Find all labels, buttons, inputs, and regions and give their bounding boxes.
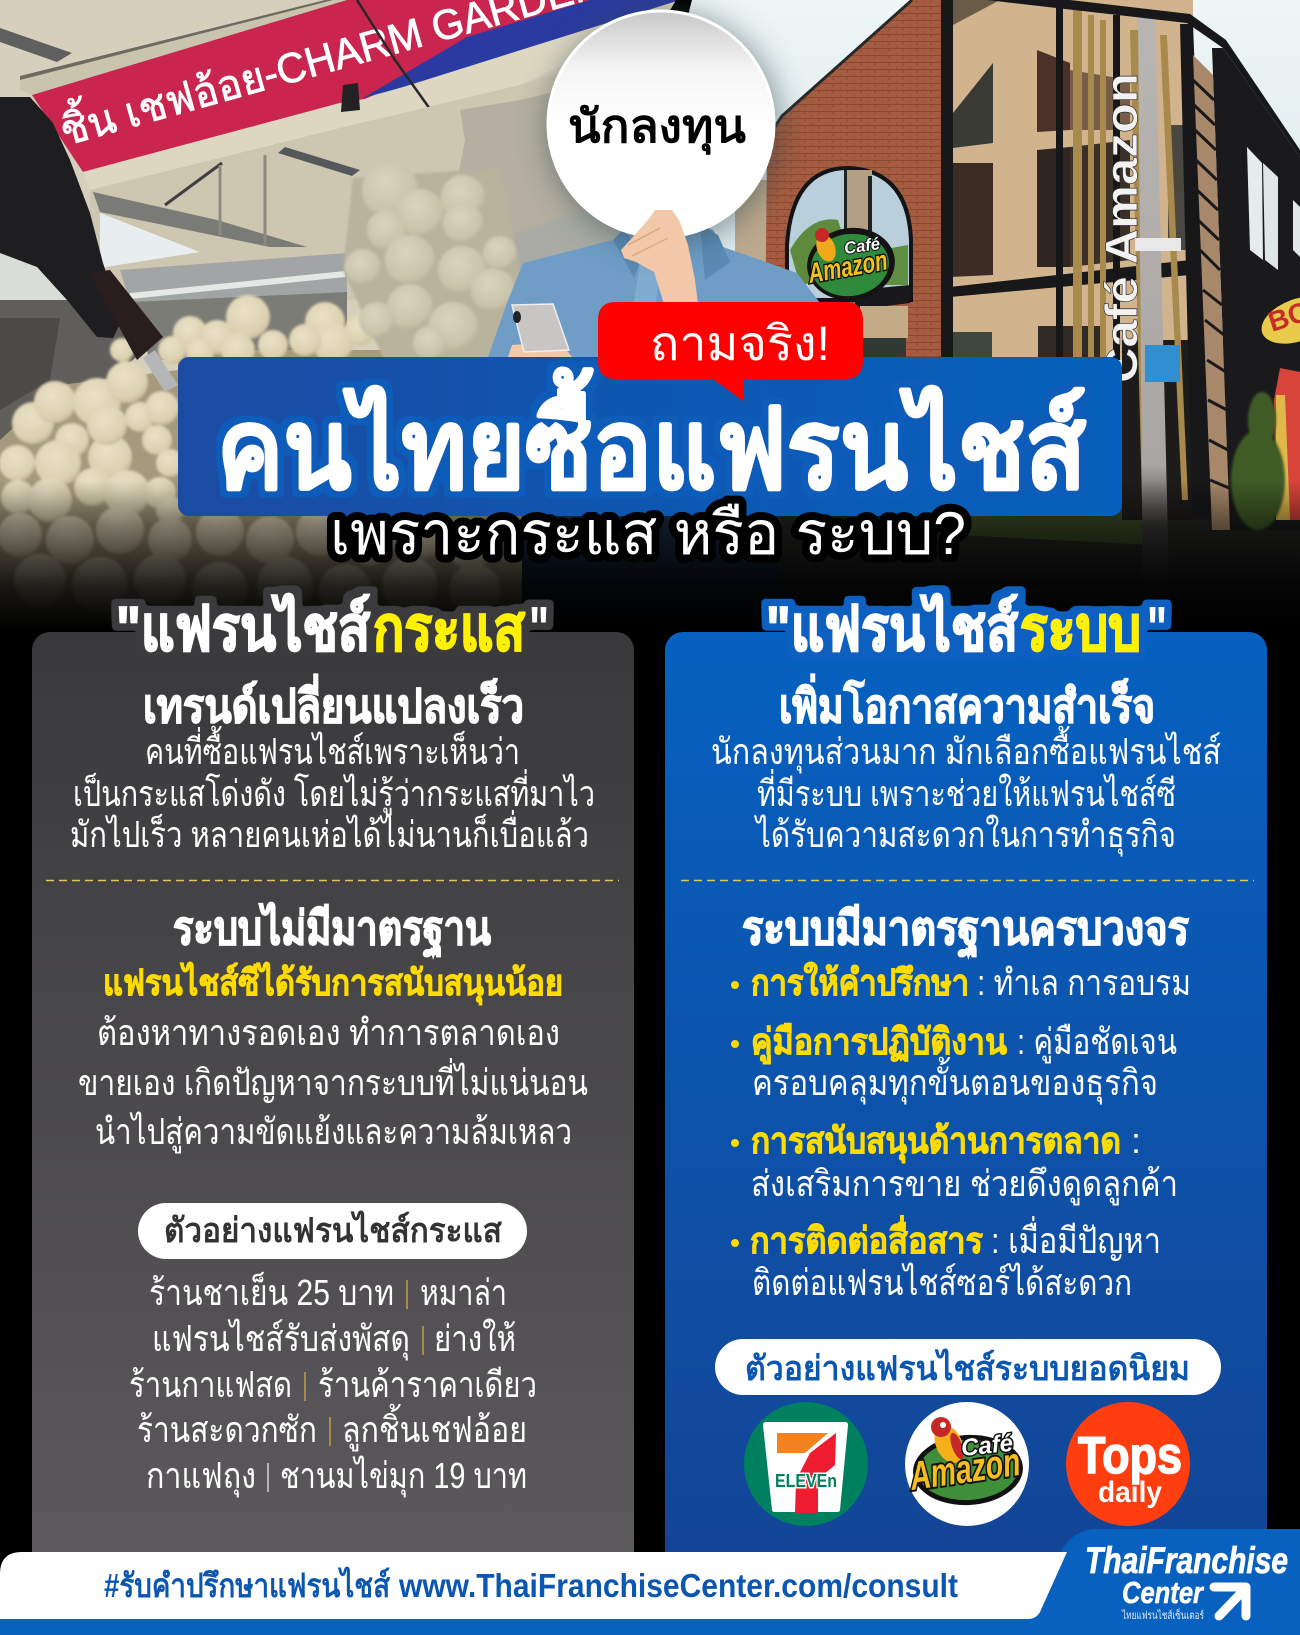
bullet: communication: การติดต่อสื่อสาร [750,1215,984,1261]
cafe amazon vertical sign: Café Amazon [1096,73,1147,383]
red speech bubble [598,302,863,401]
footer white strip [0,1552,1067,1619]
panel: trend franchise [32,593,634,1572]
logo: Cafe Amazon: Café [960,1430,1014,1462]
background photo: meatball stall [0,0,700,640]
section: fast changing trends: เป็นกระแสโด่งดัง โดยไม่รู้ว่ากระแสที่มาไว [73,769,595,816]
section: no standard system: ระบบไม่มีมาตรฐาน [173,902,491,958]
heading: trend franchise: "แฟรนไชส์ [116,593,370,664]
footer link text: www.ThaiFranchiseCenter.com/consult [398,1567,958,1604]
speech disc: investor [548,11,774,237]
list: trend franchise examples: หมาล่า [420,1272,507,1313]
bullet: consulting: : ทำเล การอบรม [977,962,1191,1003]
bullet: operations manual: : คู่มือชัดเจน [1017,1021,1177,1064]
panel: system franchise [665,593,1267,1572]
shrubs [1231,392,1285,530]
icon: arrow [1214,1587,1246,1616]
arched window [787,168,911,300]
phone [512,304,569,352]
roof edge [987,0,1300,157]
logo on arched window [802,222,900,306]
shop sign and banner [1255,287,1300,520]
section: increased chance of success [711,674,1221,857]
list: trend franchise examples: ร้านชาเย็น 25 บาท [149,1270,394,1313]
logo: ThaiFranchise Center [1020,1529,1300,1635]
section: complete standard system [731,902,1191,1303]
heading: system franchise: ระบบ [1020,595,1141,664]
footer link text: #รับคำปรึกษาแฟรนไชส์ [104,1566,391,1604]
pill: trend franchise examples [138,1203,527,1259]
list: trend franchise examples: แฟรนไชส์รับส่งพัสดุ [152,1318,410,1361]
brick wall [765,0,945,360]
darkening fade over photos [0,480,1300,630]
logo on arched window: Café [843,234,881,258]
logo: ThaiFranchise Center: Center [1122,1575,1205,1610]
hand on chin [508,210,698,357]
bullet: marketing support: การสนับสนุนด้านการตลาด [751,1120,1121,1164]
title banner [178,357,1122,516]
logo: Tops daily: daily [1098,1476,1162,1509]
bullet: consulting [731,961,1191,1003]
list: trend franchise examples: ร้านกาแฟสด [129,1364,292,1405]
vertical slats [1056,0,1212,515]
subtitle: เพราะกระแส หรือ ระบบ? [330,500,966,567]
person in denim shirt [487,225,826,640]
list: trend franchise examples: ร้านสะดวกซัก [137,1409,317,1450]
list: trend franchise examples: ลูกชิ้นเชฟอ้อย [342,1403,527,1452]
ground and hedge [780,500,1300,640]
section: increased chance of success: ได้รับความสะดวกในการทำธุรกิจ [754,814,1176,857]
logo: Cafe Amazon [905,1402,1029,1526]
section: no standard system: นำไปสู่ความขัดแย้งและความล้มเหลว [95,1111,572,1154]
heading: system franchise: "แฟรนไชส์ [766,593,1018,664]
section: no standard system: แฟรนไชส์ซีได้รับการสนับสนุนน้อย [103,961,563,1006]
bullet: marketing support: ส่งเสริมการขาย ช่วยดึงดูดลูกค้า [751,1163,1178,1206]
pill: popular system franchises: ตัวอย่างแฟรนไชส์ระบบยอดนิยม [745,1348,1190,1388]
footer link text [104,1566,958,1604]
logo: Cafe Amazon: Amazon [906,1440,1023,1499]
section: fast changing trends: เทรนด์เปลี่ยนแปลงเร็ว [143,674,524,732]
white pole [1138,10,1170,620]
bullet: communication [731,1215,1161,1303]
bullet: operations manual [731,1021,1177,1105]
section: no standard system: ต้องหาทางรอดเอง ทำการตลาดเอง [97,1012,560,1053]
section: fast changing trends [70,674,595,855]
side wing [1193,48,1300,530]
section: increased chance of success: เพิ่มโอกาสความสำเร็จ [779,674,1155,732]
heading: trend franchise: " [529,595,549,664]
bullet: communication: ติดต่อแฟรนไชส์ซอร์ได้สะดวก [752,1262,1132,1303]
logo on arched window: Amazon [805,244,890,289]
bullet: operations manual: คู่มือการปฏิบัติงาน [751,1021,1007,1065]
gloved hand and ladle [0,97,178,392]
speech disc: investor: นักลงทุน [568,100,747,155]
section: complete standard system: ระบบมีมาตรฐานครบวงจร [742,902,1189,958]
section: increased chance of success: ที่มีระบบ เพราะช่วยให้แฟรนไชส์ซี [757,769,1176,814]
lower dark facade [1122,340,1232,520]
list: trend franchise examples: กาแฟถุง [146,1455,256,1498]
section: increased chance of success: นักลงทุนส่วนมาก มักเลือกซื้อแฟรนไชส์ [711,725,1221,774]
section: no standard system: ขายเอง เกิดปัญหาจากระบบที่ไม่แน่นอน [78,1058,588,1103]
pill: trend franchise examples: ตัวอย่างแฟรนไชส์กระแส [164,1210,502,1250]
background photo: Cafe Amazon building [650,0,1300,640]
main title: คนไทยซื้อแฟรนไชส์ [217,367,1087,512]
logo: 7-Eleven: ELEVEn [775,1471,837,1491]
heading: system franchise: " [1147,595,1167,664]
bullet: marketing support: : [1131,1120,1141,1161]
meatballs in plastic bag [343,162,522,362]
list: trend franchise examples: ชานมไข่มุก 19 บาท [280,1455,527,1498]
bullet: communication: : เมื่อมีปัญหา [991,1216,1161,1261]
heading: trend franchise: กระแส [373,595,525,664]
logo: ThaiFranchise Center: ไทยแฟรนไชส์เซ็นเตอร์ [1121,1608,1204,1622]
list: trend franchise examples: ย่างให้ [434,1318,516,1359]
black column [941,0,953,360]
meatballs loose in pot [0,295,530,618]
logo: Tops daily: Tops [1078,1427,1182,1485]
heading: trend franchise [116,593,549,664]
footer bar [0,1529,1300,1635]
bullet: marketing support [731,1120,1178,1206]
disc shadow [548,12,780,244]
bullet: operations manual: ครอบคลุมทุกขั้นตอนของธุรกิจ [752,1056,1158,1105]
bullet: consulting: การให้คำปรึกษา [751,961,969,1003]
red speech bubble: ถามจริง! [650,318,830,371]
logo: Tops daily [1066,1402,1190,1526]
section: no standard system [78,902,588,1154]
section: fast changing trends: มักไปเร็ว หลายคนเห่อได้ไม่นานก็เบื่อแล้ว [70,810,589,855]
list: trend franchise examples [129,1270,537,1498]
wood facade [953,0,1193,360]
section: fast changing trends: คนที่ซื้อแฟรนไชส์เพราะเห็นว่า [145,725,520,772]
list: trend franchise examples: ร้านค้าราคาเดียว [318,1364,537,1405]
sign: red and blue banner [32,0,700,190]
pill: popular system franchises [715,1339,1221,1395]
logo: 7-Eleven [744,1402,868,1526]
